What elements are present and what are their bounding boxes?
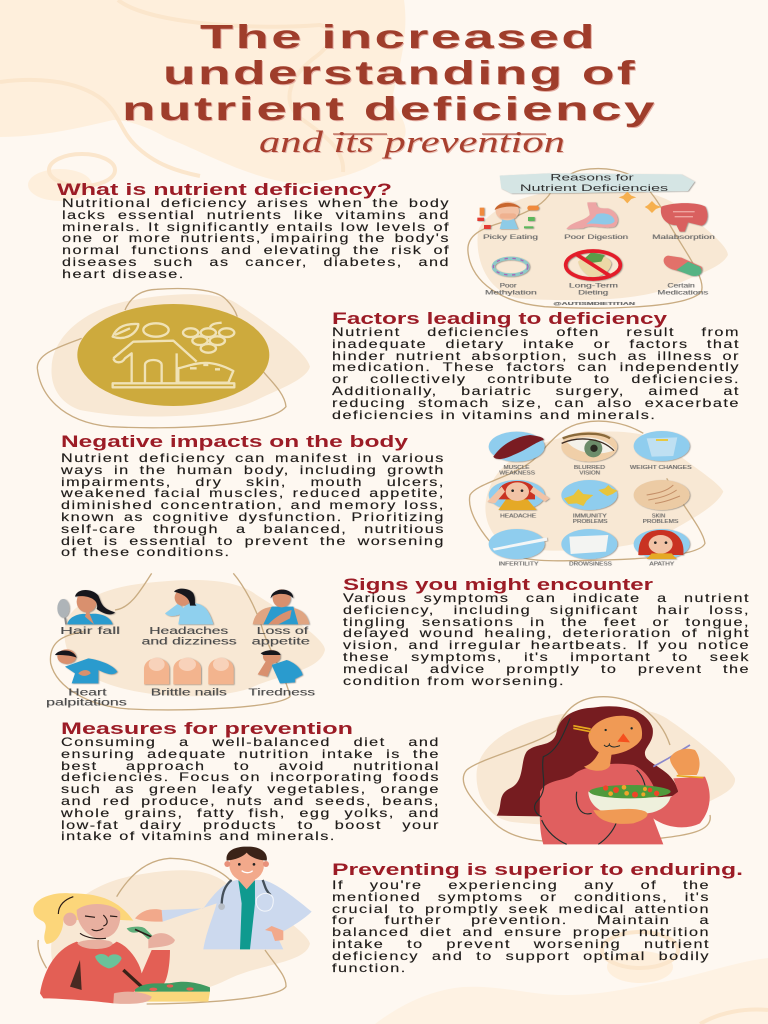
text block: factors leading to deficiency: medication. These factors can independently: [332, 360, 740, 374]
title: [122, 18, 657, 127]
panel blob: [51, 294, 310, 417]
panel outline: [37, 289, 286, 428]
panel: woman eating salad: [463, 697, 735, 844]
label: skin problems: PROBLEMS: [642, 519, 678, 525]
label: poor methylation: Methylation: [485, 289, 537, 296]
panel: factors illustration: [37, 289, 310, 428]
patient: [33, 893, 210, 1004]
neck and collar: [584, 750, 612, 771]
icon: methylation ring: [493, 258, 528, 275]
icon: immunity problems: [561, 480, 617, 510]
text block: negative impacts: Nutrient deficiency can manifest in various: [61, 451, 445, 465]
label: immunity problems: IMMUNITY: [573, 514, 607, 520]
label: loss of appetite: appetite: [251, 636, 311, 647]
label: skin problems: [642, 514, 678, 525]
text block: measures for prevention: [60, 735, 440, 843]
panel blob: [477, 188, 728, 300]
label: headache: HEADACHE: [500, 514, 536, 520]
text block: factors leading to deficiency: hinder nutrient absorption, such as illness or: [332, 349, 740, 363]
panel outline: [38, 858, 286, 1004]
hair clip: [573, 726, 591, 732]
panel outline: [50, 573, 290, 710]
label: muscle weakness: MUSCLE: [503, 465, 530, 471]
text block: measures for prevention: such as green leafy vegetables, orange: [61, 782, 440, 796]
icon: tiredness man: [258, 650, 303, 683]
icon: muscle weakness: [489, 432, 545, 462]
heading: preventing is superior to enduring: Preventing is superior to enduring.: [332, 861, 743, 879]
icon: brittle nails: [144, 658, 234, 684]
label: headaches and dizziness: [141, 626, 236, 647]
banner title: [520, 172, 669, 193]
icon: skin problems: [634, 480, 690, 510]
panel outline: [469, 421, 705, 561]
text block: factors leading to deficiency: reducing stomach size, can also exacerbate: [332, 396, 740, 410]
label: certain medications: [657, 283, 709, 296]
text block: signs you might encounter: tingling sensations in the feet or tongue,: [343, 615, 750, 629]
text block: what is nutrient deficiency: heart disease.: [62, 267, 185, 281]
label: weight changes: WEIGHT CHANGES: [630, 465, 692, 471]
title: understanding of: [163, 54, 637, 91]
label: poor methylation: [485, 283, 537, 296]
icon: intestines: [661, 203, 708, 232]
label: long-term dieting: Dieting: [578, 289, 608, 296]
text block: preventing is superior to enduring: balanced diet and ensure proper nutrition: [332, 925, 710, 939]
label: blurred vision: BLURRED: [574, 465, 605, 471]
label: blurred vision: [574, 465, 605, 476]
text block: measures for prevention: and red produce, nuts and seeds, beans,: [61, 794, 440, 808]
label: blurred vision: VISION: [579, 470, 600, 476]
text block: measures for prevention: intake of vitamins and minerals.: [61, 829, 336, 843]
text block: preventing is superior to enduring: function.: [332, 961, 407, 975]
text block: measures for prevention: deficiencies. Focus on incorporating foods: [61, 770, 440, 784]
label: immunity problems: PROBLEMS: [573, 519, 608, 525]
text block: signs you might encounter: these symptoms, it's important to seek: [343, 650, 750, 664]
facial features: [604, 727, 633, 747]
text block: preventing is superior to enduring: intake to prevent worsening nutrient: [332, 937, 710, 951]
hair: [497, 706, 678, 817]
panel outline: [468, 169, 702, 308]
icon: loss of appetite woman: [253, 589, 309, 624]
text block: preventing is superior to enduring: for further prevention. Maintain a: [332, 913, 710, 927]
text block: factors leading to deficiency: Additionally, bariatric surgery, aimed at: [332, 384, 740, 398]
label: brittle nails: Brittle nails: [151, 688, 227, 699]
text block: preventing is superior to enduring: If you're experiencing any of the: [332, 878, 710, 892]
doctor: [135, 847, 312, 949]
icon: headache woman: [487, 480, 549, 510]
text block: preventing is superior to enduring: [332, 878, 710, 975]
panel blob: [485, 432, 723, 551]
text block: factors leading to deficiency: [332, 325, 740, 422]
label: heart palpitations: [46, 688, 127, 709]
label: certain medications: Certain: [667, 283, 695, 290]
icon: heart palpitations man: [55, 649, 117, 683]
panel outline: [463, 697, 710, 841]
heading: negative impacts on the body: Negative impacts on the body: [61, 433, 409, 451]
text block: signs you might encounter: medical advice promptly to prevent the: [343, 662, 750, 676]
label: hair fall: Hair fall: [60, 626, 120, 637]
text block: negative impacts: diminished concentration, and memory loss,: [61, 498, 445, 512]
text block: what is nutrient deficiency: normal functions and elevating the risk of: [62, 243, 450, 257]
text block: what is nutrient deficiency: minerals. It significantly entails low levels of: [62, 220, 450, 234]
label: muscle weakness: [499, 465, 535, 476]
panel blob: [477, 709, 735, 825]
icon: hair fall woman: [57, 590, 115, 624]
face: [588, 716, 642, 755]
background: top curved lines: [0, 0, 343, 176]
text block: negative impacts: weakened facial muscles, reduced appetite,: [61, 486, 445, 500]
icon: blurred vision eye: [561, 432, 617, 462]
background: bottom wave: [375, 958, 768, 1024]
gold disc: [77, 304, 269, 406]
label: malabsorption: Malabsorption: [652, 234, 715, 241]
label: drowsiness: DROWSINESS: [569, 562, 612, 568]
text block: what is nutrient deficiency: one or more nutrients, impairing the body's: [62, 231, 450, 245]
text block: what is nutrient deficiency: Nutritional deficiency arises when the body: [62, 196, 450, 210]
text block: negative impacts: of these conditions.: [61, 545, 231, 559]
label: skin problems: SKIN: [652, 514, 665, 520]
label: loss of appetite: [251, 626, 311, 647]
banner title: Reasons for: [550, 172, 634, 182]
text block: signs you might encounter: deficiency, including significant hair loss,: [343, 603, 750, 617]
salad bowl: [588, 785, 671, 813]
heading: what is nutrient deficiency: What is nutrient deficiency?: [57, 181, 392, 199]
panel: signs illustration: [46, 573, 325, 710]
icon: medication pill: [664, 256, 702, 276]
panel: negative impacts illustration: [469, 421, 723, 568]
text block: signs you might encounter: vision, and irregular heartbeats. If you notice: [343, 638, 750, 652]
sweater: [540, 764, 710, 844]
label: muscle weakness: WEAKNESS: [499, 470, 535, 476]
text block: measures for prevention: low-fat dairy products to boost your: [61, 818, 440, 832]
label: headaches and dizziness: Headaches: [149, 626, 228, 637]
text block: negative impacts: known as cognitive dysfunction. Prioritizing: [61, 510, 445, 524]
panel: doctor and patient: [33, 847, 312, 1004]
text block: signs you might encounter: [343, 591, 750, 688]
title: The increased: [200, 18, 597, 55]
text block: negative impacts: self-care through a balanced, nutritious: [61, 522, 445, 536]
text block: negative impacts: diet is essential to prevent the worsening: [61, 534, 445, 548]
hand under bowl: [593, 809, 648, 824]
text block: what is nutrient deficiency: diseases such as cancer, diabetes, and: [62, 255, 450, 269]
label: source handle: @AUTISMDIETITIAN: [553, 301, 635, 307]
panel blob: [64, 580, 325, 696]
label: certain medications: Medications: [657, 289, 709, 296]
heading: factors leading to deficiency: Factors leading to deficiency: [332, 310, 668, 328]
icon: no dieting sign: [566, 251, 620, 279]
background: top-left blob: [0, 0, 406, 184]
text block: preventing is superior to enduring: crucial to promptly seek medical attention: [332, 902, 710, 916]
label: infertility: INFERTILITY: [498, 562, 539, 568]
text block: negative impacts: [60, 451, 445, 559]
banner title: Nutrient Deficiencies: [520, 183, 669, 193]
icon: stomach: [566, 202, 618, 229]
text block: preventing is superior to enduring: deficiency and to support optimal bodily: [332, 949, 710, 963]
sparkles: [619, 192, 661, 213]
panel: reasons for nutrient deficiencies: [468, 169, 728, 308]
text block: measures for prevention: whole grains, fatty fish, egg yolks, and: [61, 806, 440, 820]
label: picky eating: Picky Eating: [483, 234, 538, 241]
heading: measures for prevention: Measures for prevention: [61, 720, 353, 738]
text block: what is nutrient deficiency: [62, 196, 450, 281]
text block: factors leading to deficiency: inadequate dietary intake or factors that: [332, 337, 740, 351]
icon: drowsiness pillow: [561, 529, 617, 559]
label: headaches and dizziness: and dizziness: [141, 636, 236, 647]
label: tiredness: Tiredness: [248, 688, 315, 699]
text block: signs you might encounter: delayed wound healing, deterioration of night: [343, 626, 750, 640]
icon: picky eating child: [477, 202, 539, 229]
text block: negative impacts: ways in the human body, including growth: [61, 463, 445, 477]
text block: what is nutrient deficiency: lacks essential nutrients like vitamins and: [62, 208, 450, 222]
panel blob: [51, 870, 310, 1001]
text block: measures for prevention: best approach to avoid nutritional: [61, 759, 440, 773]
banner: [500, 173, 695, 193]
heading: signs you might encounter: Signs you might encounter: [343, 576, 654, 594]
text block: negative impacts: impairments, dry skin, mouth ulcers,: [61, 475, 445, 489]
background: bottom right ring: [602, 932, 768, 1024]
subtitle: and its prevention: [259, 124, 565, 159]
label: long-term dieting: Long-Term: [569, 283, 618, 290]
label: poor digestion: Poor Digestion: [564, 234, 628, 241]
title: nutrient deficiency: [122, 90, 657, 127]
text block: factors leading to deficiency: deficiencies in vitamins and minerals.: [332, 408, 656, 422]
text block: preventing is superior to enduring: mentioned symptoms or conditions, it's: [332, 890, 710, 904]
label: heart palpitations: palpitations: [46, 698, 127, 709]
label: immunity problems: [573, 514, 608, 525]
label: heart palpitations: Heart: [68, 688, 107, 699]
text block: signs you might encounter: condition from worsening.: [343, 674, 565, 688]
label: long-term dieting: [569, 283, 618, 296]
icon: weight changes scale: [634, 431, 690, 461]
background: small ring and blob: [28, 154, 115, 201]
label: poor methylation: Poor: [500, 283, 517, 290]
label: loss of appetite: Loss of: [256, 626, 308, 637]
text block: measures for prevention: Consuming a well-balanced diet and: [61, 735, 440, 749]
icon: person with food: [113, 323, 234, 387]
hand and fork: [653, 745, 703, 778]
text block: signs you might encounter: Various symptoms can indicate a nutrient: [343, 591, 750, 605]
icon: apathy woman: [634, 529, 690, 559]
text block: factors leading to deficiency: or collectively contribute to deficiencies.: [332, 372, 740, 386]
text block: measures for prevention: ensuring adequate nutrition intake is the: [61, 747, 440, 761]
text block: factors leading to deficiency: Nutrient deficiencies often result from: [332, 325, 740, 339]
hair strand lines: [535, 718, 646, 844]
icon: infertility test: [489, 529, 547, 559]
label: apathy: APATHY: [649, 562, 674, 568]
icon: headache woman: [165, 589, 213, 624]
